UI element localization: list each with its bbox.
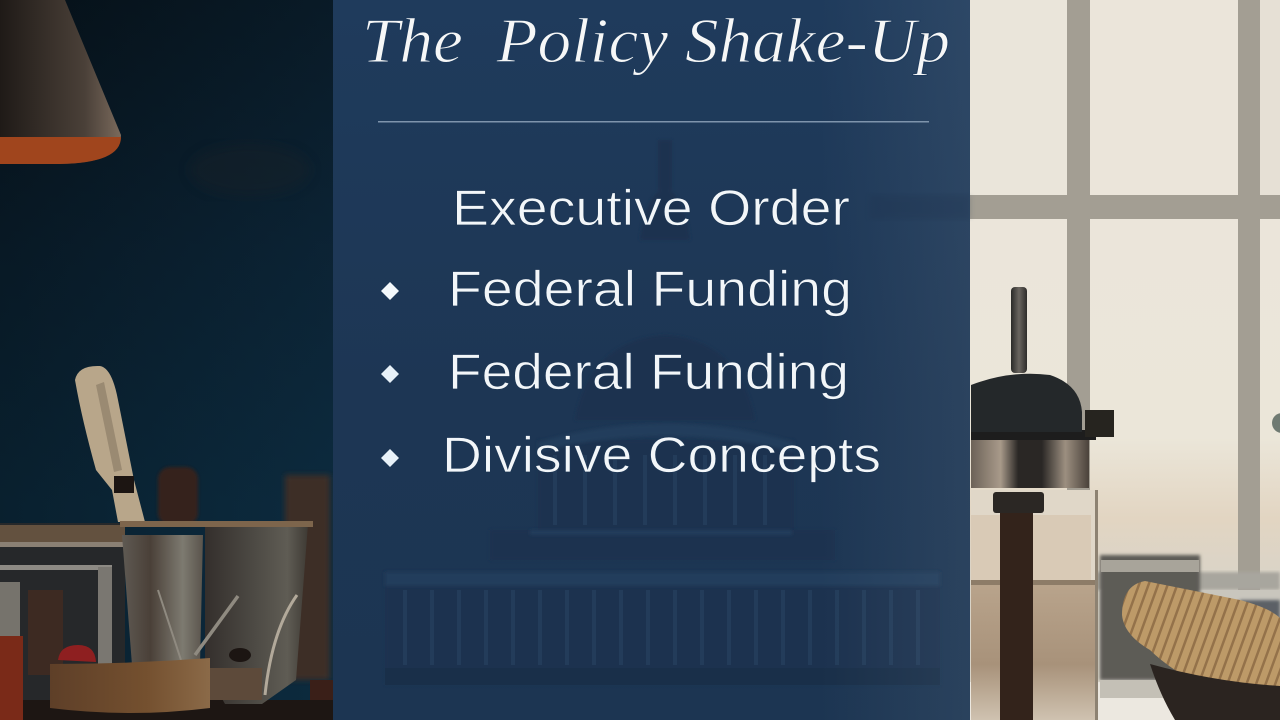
- title: The Policy Shake-Up: [362, 5, 950, 76]
- panel: policy: [333, 0, 970, 720]
- glass left: [122, 535, 203, 665]
- divider: [378, 121, 929, 122]
- bowl: [50, 658, 210, 713]
- icon: pendant lamp: [0, 0, 121, 164]
- glass right: [120, 521, 313, 704]
- capitol building silhouette: [385, 140, 940, 685]
- table and utensils at lower left: [0, 366, 333, 720]
- list item: federal funding 1: Federal Funding: [448, 261, 852, 317]
- list item: federal funding 2: Federal Funding: [448, 344, 849, 400]
- tin box: [0, 523, 125, 702]
- list item: divisive concepts: Divisive Concepts: [442, 427, 881, 483]
- background: bright window: [960, 0, 1280, 720]
- icon: french press: [971, 287, 1114, 720]
- spoon handle: [75, 366, 145, 522]
- window glow through panel: [820, 0, 970, 720]
- list item: executive order: Executive Order: [452, 180, 850, 236]
- red glass: [0, 582, 23, 720]
- bowl with bread: [1122, 581, 1280, 720]
- background: dark room wall: [0, 0, 340, 720]
